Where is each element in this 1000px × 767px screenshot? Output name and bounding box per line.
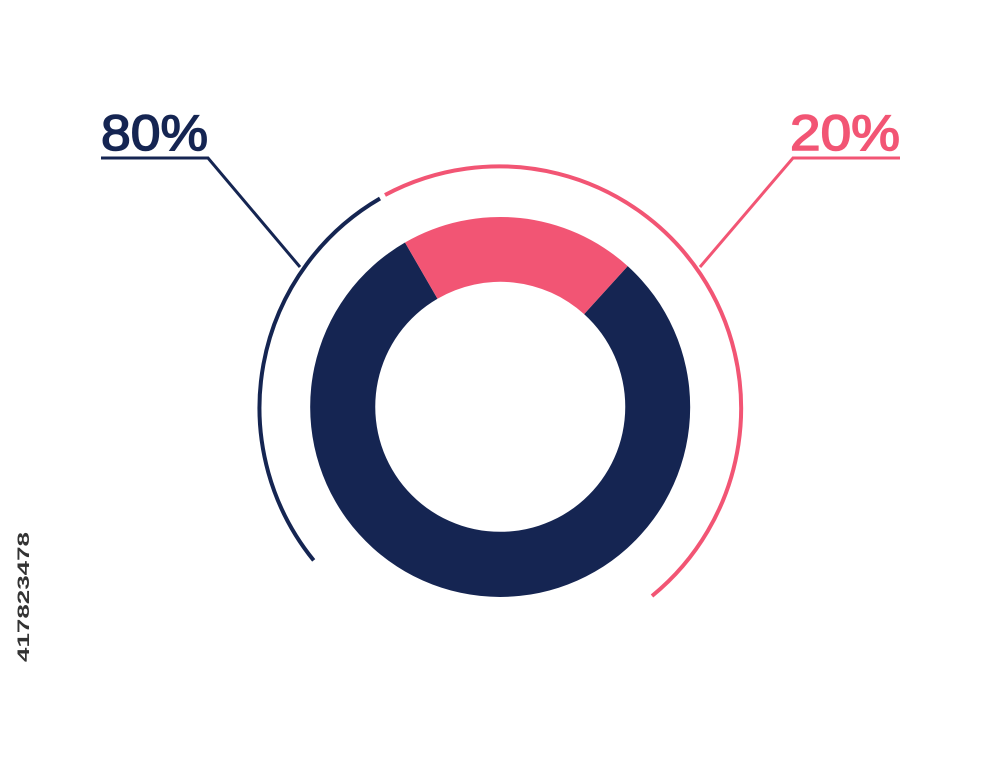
pink leader line (700, 158, 900, 267)
pink outer arc (385, 166, 741, 596)
pink segment 20% (405, 217, 628, 314)
label 20%: 20% (790, 105, 900, 161)
navy segment 80% (310, 242, 690, 597)
label 80%: 80% (101, 105, 208, 161)
donut chart (310, 217, 690, 597)
navy outer arc (260, 198, 380, 560)
navy leader line (101, 158, 300, 267)
watermark id: 417823478 (14, 532, 33, 662)
